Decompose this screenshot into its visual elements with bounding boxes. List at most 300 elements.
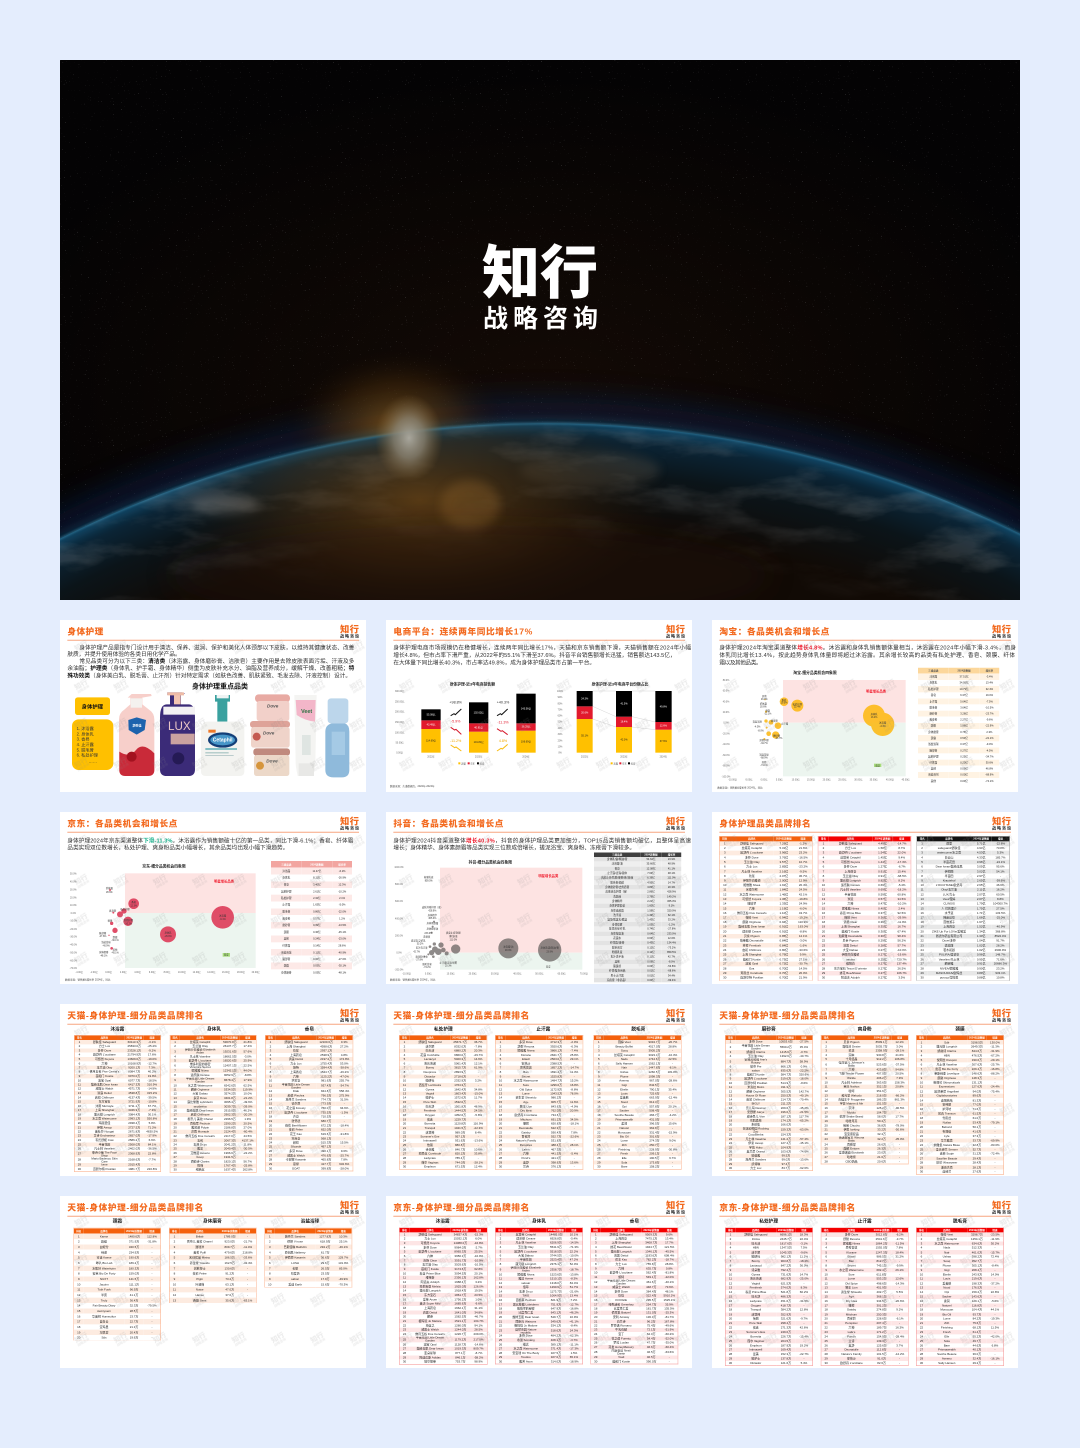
data table: 365.3% (667, 900, 676, 903)
table: 天猫: 1.19亿 (780, 907, 788, 910)
table: 香皂: 15 (594, 1294, 597, 1297)
table: 颈膜: Sacrifier Beaute (936, 1157, 957, 1160)
table: 颈霜: - (151, 1288, 152, 1291)
table: 止汗露: 25 (499, 1143, 502, 1147)
data table: 2024销售额 (310, 863, 324, 866)
table: 沐浴露: 朗姿 (427, 1315, 433, 1318)
table headings: 止汗露 (858, 1217, 872, 1224)
bubble chart: -48.1% (100, 955, 107, 957)
table: 止汗露: 274.8万 (876, 1308, 887, 1311)
table: 私处护理: 3 (730, 1242, 731, 1245)
table: 脱毛膏: 6.7% (669, 1156, 676, 1160)
table: 香皂: 4 (270, 1053, 271, 1056)
table: 沐浴露: 11 (78, 1083, 81, 1086)
table: 沐浴露: -15.3% (474, 1233, 483, 1236)
table: 私处护理: 25671.7万 (453, 1040, 467, 1044)
table: 抖音: 5 (921, 860, 923, 864)
table: 脱毛膏: 爱美肤 (942, 1282, 951, 1285)
table: 抖音: 半亩花田 (943, 860, 955, 864)
data table: 香皂 (931, 694, 936, 697)
table: 香皂: 六神 (618, 1267, 624, 1270)
table: 沐浴露: 玉兰油 Olay (97, 1066, 112, 1069)
table: 沐浴露: 凡士林 Vaseline (94, 1147, 115, 1150)
table: 香皂: 7475.1万 (645, 1237, 657, 1240)
table: 身体乳: 1.9% (244, 1117, 251, 1121)
table: 私处护理: 1041.5万 (454, 1126, 466, 1130)
data table: 2.61亿 (313, 890, 321, 893)
table: 爽身粉: - (899, 1143, 900, 1146)
data table: 0.63亿 (647, 937, 655, 940)
table: 脱毛膏: -20.7% (668, 1040, 677, 1044)
table: 颈膜: HBN (944, 1054, 950, 1057)
table: 私处护理: 12.1% (474, 1062, 482, 1065)
table: 脱毛膏: 842.5万 (649, 1083, 660, 1087)
table: 香皂: 53.0% (340, 1062, 348, 1065)
table: 身体乳 (170, 1035, 257, 1174)
table: 止汗露: 2 (825, 1237, 827, 1241)
data table: 13.4% (986, 681, 993, 684)
table: 私处护理: Ladycare (424, 1156, 436, 1160)
table: 止汗露: 1864.2万 (876, 1242, 888, 1245)
table: 身体乳: 1767.4万 (224, 1164, 236, 1167)
table: 香皂: 27.2% (340, 1045, 348, 1048)
bubble chart: 20.00亿 (823, 778, 831, 782)
table: 香皂: 35.9% (665, 1303, 673, 1306)
table: 私处护理: 14.6% (474, 1057, 482, 1061)
bubble chart: 30.00亿 (854, 778, 863, 782)
table: 抖音: 15 (920, 907, 924, 910)
table: 香皂: 佰草集 Baturel (612, 1311, 631, 1314)
data table: 三级品类 (928, 669, 938, 672)
table: 脱毛膏: 512.3万 (972, 1246, 982, 1249)
table: 身体乳: 119.9% (243, 1088, 253, 1091)
table: 身体乳: 44.0% (244, 1069, 252, 1072)
source note: 数据来源：久谦数据库，2022年-2024年 (390, 784, 435, 788)
table: 沐浴露: 26 (403, 1343, 406, 1346)
title: 身体护理 (67, 625, 104, 636)
table: 沐浴露: -9.2% (148, 1049, 156, 1052)
table: 脱毛膏: 18 (920, 1308, 923, 1311)
table: 身体乳: 丝塔芙 Cetaphil (190, 1040, 210, 1044)
table: 香皂: 1 (595, 1233, 597, 1236)
table: 私处护理: - (803, 1313, 804, 1316)
logo: 战略咨询 (992, 1017, 1011, 1023)
table: 京东: -14.7% (897, 842, 906, 845)
table: 身体乳: 增速 (245, 1036, 250, 1039)
product: Cetaphil bottle: Cetaphil (213, 738, 233, 744)
category list: 3. 香皂 (77, 736, 90, 742)
table: 私处护理: 5400.3万 (454, 1057, 466, 1061)
panel: 天猫 私处护理 止汗露 脱毛膏 ranking (386, 1004, 692, 1176)
table: 沐浴露: 1.0% (475, 1298, 482, 1301)
table: 止汗露: 691.2万 (551, 1118, 561, 1121)
table: 香皂: 卡安娜 Kasarrin (286, 1158, 306, 1161)
table: 颈膜: 28 (920, 1161, 923, 1164)
table: 沐浴露: 3084.4万 (128, 1113, 140, 1116)
table: 脱毛膏: Finishing (618, 1148, 630, 1151)
table: 脱毛膏: 1260.5万 (649, 1070, 660, 1074)
logo: 战略咨询 (340, 1209, 359, 1215)
table: 抖音: 73.8% (996, 846, 1005, 850)
body text (393, 836, 691, 851)
table: 抖音: 368.8% (995, 930, 1005, 933)
table: 身体乳: 19231.6万 (223, 1050, 237, 1053)
table: 沐浴露: 126.0% (474, 1285, 484, 1288)
table: 脱毛膏: - (672, 1075, 673, 1078)
bubble chart (722, 670, 910, 782)
table: 京东: 28 (822, 967, 825, 970)
table: 抖音: 0.89亿 (977, 971, 985, 975)
table: 磨砂膏: 866.1万 (781, 1065, 791, 1068)
table: 抖音: 10.8% (996, 976, 1005, 979)
table: 私处护理: 28 (729, 1352, 732, 1356)
panel: 天猫 磨砂膏 爽身粉 颈膜 ranking (712, 1004, 1018, 1176)
table: 脱毛膏: 3 (921, 1242, 922, 1245)
table: 私处护理: 61.9% (474, 1066, 482, 1069)
data table: 7.63亿 (647, 872, 655, 875)
table: 身体乳: 549.7万 (551, 1315, 561, 1319)
table: 止汗露: 531.8万 (551, 1139, 561, 1142)
table: 止汗露: 1043.5万 (550, 1092, 562, 1095)
table: 天猫: 16 (723, 911, 726, 915)
table: 京东: 1.58亿 (878, 846, 887, 850)
table: 沐浴露: 3721.9万 (128, 1100, 140, 1103)
bubble chart: -10.0% (70, 921, 77, 923)
bubble chart: 其他 (113, 948, 118, 952)
table: 身体乳: 佛月五谷 Five Cereal's (185, 1134, 215, 1138)
table: 浴盐浴球: 8 (269, 1272, 271, 1275)
table: 天猫: 17 (723, 916, 726, 919)
table: 脱毛膏: 4 (598, 1053, 600, 1056)
table: 私处护理: 增速 (801, 1229, 806, 1232)
table: 香皂: 15.5% (340, 1141, 348, 1144)
table: 香皂: -18.4% (340, 1124, 349, 1127)
data table: 20.3% (668, 886, 675, 889)
table: 京东: 清扬 Clear (844, 920, 857, 924)
table: 颈霜: 半唐 (101, 1293, 107, 1296)
table: 天猫: 7 (724, 870, 726, 873)
table: 抖音: Krautehof (943, 879, 955, 882)
table: 止汗露: 3012.8万 (876, 1233, 888, 1236)
table: 颈膜: - (994, 1081, 995, 1084)
bubble chart: 止汗露/走珠/喷雾 (440, 960, 458, 964)
table: 香皂: 937.4万 (321, 1084, 331, 1087)
bar chart: sales: 2022年 (427, 754, 435, 758)
table: 抖音: purocy/涅玛思 (940, 976, 958, 979)
table: 磨砂膏: Zoo (753, 1130, 758, 1133)
table: 私处护理: 2024年销售额 (778, 1229, 794, 1232)
table: 京东: 17 (822, 916, 825, 919)
table: 身体乳: 多芬 Dove (519, 1334, 533, 1337)
data table: 纤体霜 (929, 761, 937, 764)
table: 止汗露: -4.0% (570, 1105, 578, 1108)
table: 香皂: 10 (269, 1079, 272, 1082)
table: 身体乳: 22 (499, 1324, 502, 1327)
table: 止汗露: 3 (500, 1049, 501, 1052)
table: 爽身粉: 凡士林 Adelmar (841, 1081, 862, 1084)
table: 沐浴露: 10 (403, 1272, 406, 1275)
table: 爽身粉: 哈喽熊 (847, 1155, 856, 1159)
table: 沐浴露: 蓮元樹 Longrich (420, 1289, 440, 1292)
table: 颈膜: 61.0万 (973, 1116, 981, 1120)
table: 天猫: 品牌名 (748, 837, 756, 840)
table: 香皂: 9509.3万 (645, 1233, 657, 1236)
table: 香皂: Garden (291, 1086, 301, 1089)
table: 京东: 3.5% (898, 976, 905, 979)
table: 脱毛膏: 461.0万 (972, 1251, 982, 1254)
table: 脱毛膏: 2024年销售额 (647, 1036, 662, 1039)
table: 身体乳: -17.3% (569, 1347, 579, 1350)
table: 天猫: -19.2% (798, 916, 808, 919)
table: 颈膜: 迪丽纳哈 (941, 1099, 953, 1102)
table: 止汗露: 狮王 Lion (520, 1105, 532, 1108)
bar chart: share: 10% (558, 746, 562, 748)
table: 香皂: 96.2万 (647, 1320, 656, 1323)
table: 颈膜: 94.0万 (973, 1090, 981, 1093)
bar chart: share: 80% (558, 703, 562, 705)
table: 身体磨膏: 73.2万 (225, 1277, 234, 1280)
table: 私处护理: 19 (729, 1313, 732, 1316)
data table: 12.08亿 (646, 867, 656, 870)
table: 脱毛膏: 143.6万 (972, 1295, 982, 1298)
table: 止汗露: 兰诗 (523, 1165, 529, 1168)
data table: -26.9% (338, 876, 346, 879)
watermark (712, 1004, 1018, 1176)
table: 颈膜: 32.8万 (973, 1143, 981, 1147)
table: 身体乳: 15 (173, 1105, 177, 1108)
table: 京东: 3 (823, 851, 824, 854)
data table: 沐浴露 (929, 675, 937, 678)
table: 天猫: 0.94亿 (780, 916, 788, 919)
table: 爽身粉: 158.3% (895, 1081, 905, 1084)
table: 私处护理: 5 (730, 1251, 731, 1254)
table: 止汗露: 15 (824, 1295, 828, 1298)
table: 止汗露: 21 (499, 1126, 502, 1130)
table: 止汗露: 13 (499, 1092, 502, 1095)
table: 磨砂膏: 20 (729, 1123, 732, 1126)
bubble chart: 萌芽 (546, 964, 551, 968)
table: 磨砂膏: -8.6% (800, 1081, 808, 1085)
table: 脱毛膏: 17 (597, 1109, 600, 1112)
table: 止汗露: 11.3% (570, 1070, 578, 1074)
table: 私处护理: -9.7% (800, 1317, 808, 1320)
table: 身体乳: -14.5% (569, 1241, 579, 1244)
table: 香皂: -40.1% (665, 1280, 674, 1284)
table: 香皂: 5910.2% (663, 1294, 675, 1297)
table: 爽身粉: Moiolo (847, 1111, 856, 1114)
table: 私处护理: - (803, 1348, 804, 1351)
table: 身体乳: 10.0% (244, 1092, 252, 1095)
table: 私处护理: -9.6% (800, 1251, 808, 1254)
product: LUX bottle (160, 692, 195, 776)
bar chart: share: 身体护理-近3年电商平台份额占比 (592, 681, 649, 686)
table: 沐浴露: 25833.0万 (127, 1044, 141, 1048)
table: 京东: 品牌名 (847, 837, 854, 840)
table: 天猫: 27 (723, 962, 726, 965)
table: 脱毛膏: - (672, 1152, 673, 1155)
bar chart: share (557, 681, 672, 765)
table: 身体乳: 389.1万 (551, 1343, 561, 1346)
table: 颈霜: 19.6万 (130, 1336, 138, 1339)
table: 沐浴露: 3711.1万 (128, 1104, 140, 1108)
table: 私处护理: 25 (403, 1143, 406, 1147)
table: 抖音: CLINSIS (943, 902, 955, 905)
table: 沐浴露: 4571.7万 (128, 1087, 140, 1090)
bar chart: sales: 101.81亿 (474, 740, 484, 744)
table: 沐浴露: 14388.0万 (454, 1241, 467, 1245)
table: 香皂: 497.1万 (321, 1145, 331, 1148)
table: 沐浴露: 40.2% (148, 1070, 156, 1073)
data table: 颈膜 (284, 931, 289, 934)
table: 磨砂膏: 品牌名 (752, 1036, 760, 1039)
table: 身体乳: 371.4万 (551, 1347, 561, 1350)
table: 爽身粉: 104.7万 (876, 1111, 887, 1114)
table: 脱毛膏: 柔润 (621, 1122, 627, 1125)
table: 香皂: 花之语 Foresty (611, 1337, 631, 1340)
table: 沐浴露: 2168.6万 (128, 1158, 140, 1161)
bar chart: sales: 天猫 (461, 761, 466, 765)
label box (75, 697, 110, 715)
table: 止汗露: Perspirex (520, 1143, 532, 1147)
table: 香皂: 17.7% (665, 1241, 673, 1244)
bubble chart: 20.0% (723, 712, 729, 714)
table: 浴盐浴球: 29.6万 (321, 1261, 330, 1264)
body text (393, 643, 691, 666)
table: 脱毛膏: - (994, 1348, 995, 1351)
table: 脱毛膏: Soothe Beaute (937, 1352, 956, 1356)
table: 颈膜: 23 (920, 1139, 923, 1142)
table: 磨砂膏: 1415.6万 (780, 1050, 792, 1054)
table: 身体乳: 10.1% (570, 1233, 578, 1236)
body text: 身体护理2024年京东渠道整体下滑-11.3%。沐浴露作为销售额破十亿的第一品类，同比下滑-6.1%；香皂、纤体霜 (67, 837, 354, 845)
table: 磨砂膏: 15 (729, 1102, 732, 1105)
table: 磨砂膏: 3 (730, 1050, 731, 1054)
table: 沐浴露: 1280.0万 (454, 1324, 466, 1327)
table: 沐浴露: 4538.8万 (128, 1091, 140, 1095)
table: 香皂: 宝丁 (618, 1332, 624, 1336)
bubble chart: -80.0% (722, 766, 730, 768)
table: 天猫: 10 (723, 883, 726, 887)
table: 香皂: 28 (594, 1350, 597, 1354)
table: 浴盐浴球: 10 (268, 1282, 271, 1286)
table: 颈膜: Bebond (942, 1125, 952, 1129)
bubble chart: 乳汁洗手液 (416, 946, 428, 950)
table: 香皂: 18 (594, 1307, 597, 1310)
data table: 身体精华 (612, 900, 622, 903)
table: 颈膜: 148.6万 (972, 1072, 982, 1075)
table: 沐浴露: Care (101, 1160, 108, 1163)
table: 脱毛膏: 35.4% (668, 1088, 677, 1091)
table: 爽身粉: 青蛙王子 Froggmine (838, 1098, 865, 1101)
table: 抖音: 10 (920, 883, 924, 887)
table: 止汗露: 13.6% (570, 1161, 578, 1164)
table: 磨砂膏: 吾儿玛 Desmar (746, 1106, 766, 1110)
table: 私处护理: 排名 (402, 1036, 407, 1039)
logo: 战略咨询 (992, 633, 1011, 639)
table: 止汗露: 2024年销售额 (874, 1229, 889, 1232)
table: 私处护理: 29 (729, 1357, 732, 1360)
bar chart: share: 42.0% (620, 739, 628, 742)
table: 止汗露: Deonatulle (519, 1126, 533, 1130)
table: 脱毛膏: 28 (597, 1156, 600, 1160)
table: 止汗露: Lume (848, 1277, 855, 1280)
table: 香皂: 476.6万 (321, 1154, 331, 1157)
table: 沐浴露: 品牌名 (426, 1229, 434, 1232)
data table: 身体按摩油 (611, 932, 624, 935)
table: 私处护理: 621.5万 (781, 1282, 791, 1285)
table: 身体乳: sekoar (521, 1281, 530, 1285)
body text (67, 837, 354, 851)
table: 脱毛膏: 44.1% (991, 1308, 999, 1311)
data table: 0.00亿 (960, 780, 968, 783)
table: 颈膜: - (994, 1116, 995, 1120)
table: 香皂: -35.0% (665, 1341, 674, 1344)
table: 京东: 6 (823, 865, 824, 868)
body text: 肤质，并提升使用体验的各类日用化学产品。 (67, 650, 181, 658)
table: 香皂: -25.7% (340, 1154, 349, 1157)
table: 京东: 0.36亿 (878, 916, 887, 919)
table: 止汗露: - (899, 1321, 900, 1325)
table: 脱毛膏: 6.8% (992, 1344, 998, 1347)
table: 颈膜: - (994, 1130, 995, 1133)
table: 沐浴露: 753.7万 (455, 1360, 466, 1363)
data table: -27.6% (338, 958, 346, 961)
table: 抖音: 20 (920, 930, 924, 933)
logo (992, 815, 1011, 831)
table: 香皂: 782.2万 (646, 1258, 656, 1261)
table: 止汗露: 7 (500, 1066, 501, 1069)
table: 私处护理: 妇炎洁 (751, 1242, 760, 1245)
bar chart: share: 2022年 (581, 754, 589, 758)
table: 天猫: Eva (749, 967, 754, 970)
table: 身体乳: 6206.9万 (550, 1241, 562, 1244)
table: 止汗露: 82.6万 (877, 1361, 886, 1365)
table: 香皂: 施特 (618, 1275, 624, 1279)
table: 止汗露: -6.1% (896, 1317, 903, 1320)
table: 香皂: 斐彩 Felee (289, 1128, 303, 1131)
table: 止汗露: 曼秀雷敦 (846, 1246, 857, 1249)
table: 身体乳: - (247, 1155, 248, 1159)
table: 浴盐浴球: 25.1% (339, 1240, 347, 1243)
table: 天猫: 14.5% (799, 967, 807, 970)
table: 磨砂膏: 187.1万 (781, 1115, 791, 1118)
table: 身体乳: 1966.6万 (224, 1151, 236, 1155)
data table (918, 668, 999, 785)
table: 磨砂膏: 0.9% (801, 1065, 807, 1068)
table: 私处护理: 舒肤佳 Safeguard (744, 1233, 767, 1236)
table: 脱毛膏: 557.8万 (649, 1105, 660, 1108)
table: 沐浴露: 东方宝石 (424, 1293, 436, 1297)
table: 沐浴露: -14.6% (474, 1343, 483, 1346)
table: 沐浴露: -7.7% (148, 1158, 156, 1161)
table: 爽身粉: 912.2万 (876, 1057, 887, 1061)
table: 香皂: 136.0万 (646, 1315, 656, 1319)
table: 止汗露: Pond's (521, 1156, 530, 1160)
table: 磨砂膏: - (803, 1085, 804, 1089)
table: 脱毛膏: -15.9% (668, 1131, 677, 1134)
table: 香皂: 27 (269, 1154, 272, 1157)
table: 沐浴露: 71.2% (148, 1126, 156, 1129)
body text: 品类实现双位数增长，私处护理、爽身粉品类小幅增长，其余品类均出现小幅下滑趋势。 (67, 843, 288, 851)
table: 香皂: 22 (594, 1324, 597, 1327)
table: 京东: 0.47亿 (878, 902, 887, 905)
table: 香皂: 3 (270, 1049, 271, 1052)
table: 香皂: 760.0万 (321, 1106, 331, 1110)
table: 止汗露: 368.1万 (876, 1295, 887, 1298)
table: 京东: 15 (822, 907, 825, 910)
table: 止汗露: Old Spice (845, 1282, 858, 1285)
table: 止汗露: 622.9万 (551, 1126, 561, 1130)
